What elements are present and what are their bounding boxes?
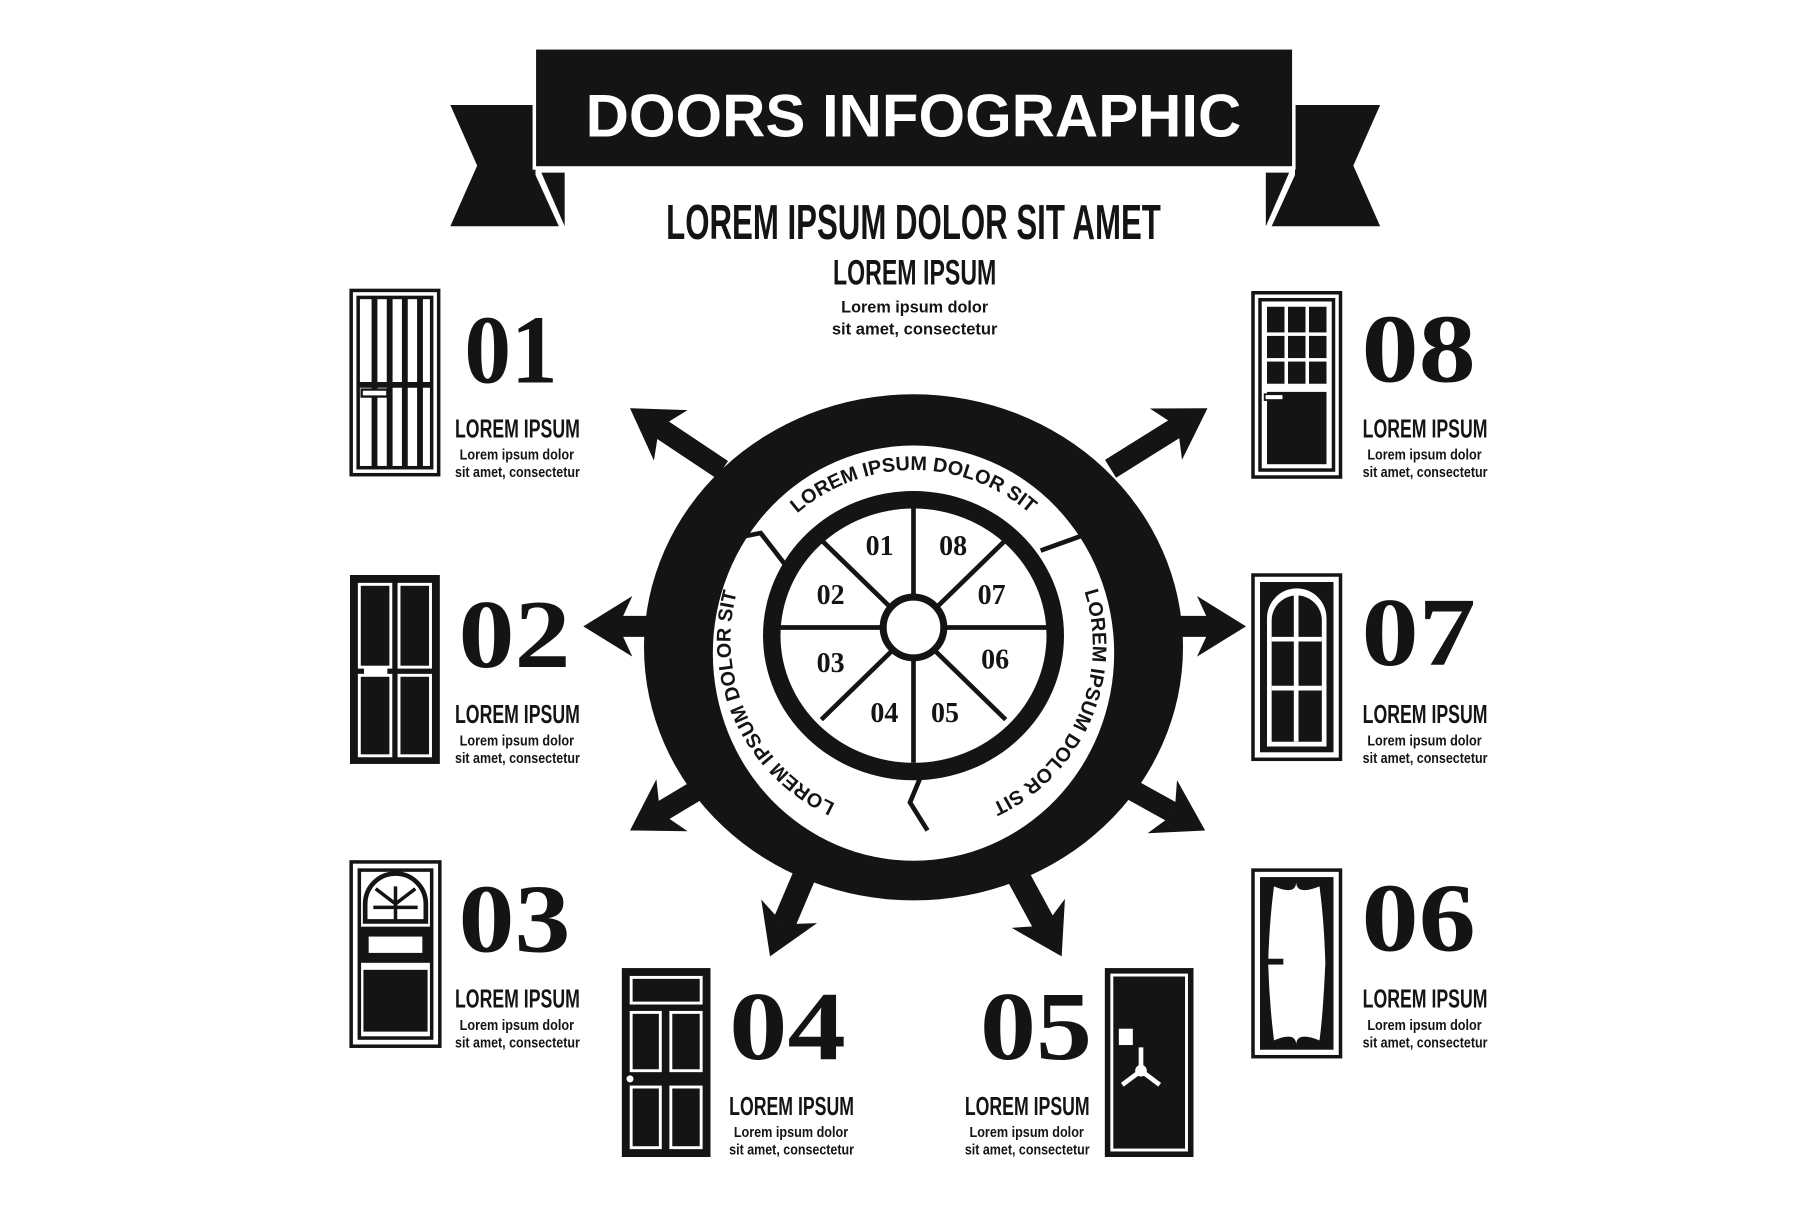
item 02 text: sit amet, consectetur: [455, 751, 580, 767]
item 06 text: LOREM IPSUM: [1363, 986, 1487, 1014]
item 07 text: sit amet, consectetur: [1363, 751, 1488, 767]
item 04 text: Lorem ipsum dolor: [734, 1125, 848, 1141]
segment numbers: 06: [981, 644, 1009, 675]
item 05 text: sit amet, consectetur: [965, 1143, 1090, 1159]
door 03: [351, 862, 440, 1046]
door 07: [1253, 575, 1340, 759]
segment numbers: 01: [866, 531, 894, 562]
item 06 text: 06: [1362, 865, 1476, 973]
item 06 text: sit amet, consectetur: [1363, 1035, 1488, 1051]
segment numbers: 03: [817, 648, 845, 679]
segment numbers: 07: [978, 580, 1006, 611]
title banner: [450, 48, 1380, 226]
wheel: [644, 394, 1183, 900]
item 06 text: Lorem ipsum dolor: [1367, 1018, 1482, 1034]
item 03 text: Lorem ipsum dolor: [460, 1018, 574, 1034]
door 01: [351, 290, 439, 475]
arrows: [583, 383, 1246, 971]
segment lines: [780, 509, 1046, 763]
item 05 text: [965, 973, 1092, 1159]
item 07 text: 07: [1362, 579, 1476, 687]
item 01 text: LOREM IPSUM: [455, 415, 580, 443]
item 07 text: Lorem ipsum dolor: [1367, 733, 1482, 749]
segment numbers: 04: [870, 698, 898, 729]
item 04 text: sit amet, consectetur: [729, 1143, 854, 1159]
segment numbers: 08: [939, 531, 967, 562]
item 02 text: Lorem ipsum dolor: [460, 733, 574, 749]
item 01 text: Lorem ipsum dolor: [460, 448, 574, 464]
item 03 text: [455, 866, 580, 1051]
item 01 text: 01: [464, 297, 558, 405]
item 04 text: LOREM IPSUM: [729, 1093, 854, 1121]
item 03 text: LOREM IPSUM: [455, 986, 580, 1014]
item 02 text: LOREM IPSUM: [455, 701, 580, 729]
item 03 text: 03: [458, 866, 570, 974]
item 04 text: [729, 973, 854, 1159]
item 05 text: Lorem ipsum dolor: [969, 1125, 1084, 1141]
item 03 text: sit amet, consectetur: [455, 1035, 580, 1051]
item 05 text: 05: [980, 973, 1092, 1081]
item 08 text: [1362, 295, 1488, 481]
wheel: LOREM IPSUM DOLOR SIT: [996, 588, 1107, 816]
door 04: [622, 968, 710, 1157]
item 02 text: 02: [458, 581, 570, 689]
item 02 text: [455, 581, 580, 767]
segment numbers: [817, 531, 1009, 729]
item 08 text: LOREM IPSUM: [1363, 415, 1487, 443]
cracks: [714, 523, 1118, 830]
wheel: LOREM IPSUM DOLOR SIT: [790, 456, 1038, 513]
subtitle: LOREM IPSUM DOLOR SIT AMET: [666, 196, 1161, 250]
title banner: DOORS INFOGRAPHIC: [586, 81, 1241, 149]
segment numbers: 02: [817, 580, 845, 611]
top text block: LOREM IPSUM: [833, 254, 996, 293]
door 08: [1253, 293, 1340, 477]
top text block: [832, 254, 998, 339]
item 07 text: LOREM IPSUM: [1363, 701, 1487, 729]
item 01 text: sit amet, consectetur: [455, 465, 580, 481]
item 05 text: LOREM IPSUM: [965, 1093, 1090, 1121]
door 02: [350, 575, 440, 764]
door 06: [1253, 870, 1340, 1057]
item 08 text: Lorem ipsum dolor: [1367, 448, 1482, 464]
segment numbers: 05: [931, 698, 959, 729]
item 04 text: 04: [729, 973, 846, 1081]
item 06 text: [1362, 865, 1488, 1051]
item 08 text: sit amet, consectetur: [1363, 465, 1488, 481]
wheel: LOREM IPSUM DOLOR SIT: [716, 589, 834, 816]
item 08 text: 08: [1362, 295, 1476, 403]
door 05: [1105, 968, 1194, 1157]
hub: [883, 597, 944, 658]
top text block: Lorem ipsum dolor: [841, 299, 989, 317]
item 01 text: [455, 297, 580, 481]
top text block: sit amet, consectetur: [832, 321, 998, 339]
item 07 text: [1362, 579, 1488, 767]
